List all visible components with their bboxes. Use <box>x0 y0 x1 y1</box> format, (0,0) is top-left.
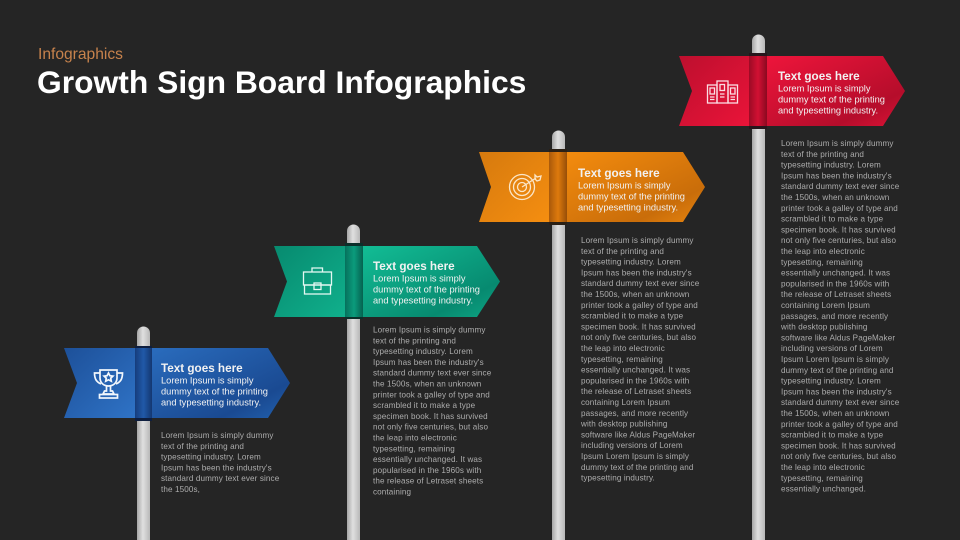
body text: passages, and more recently <box>781 312 889 321</box>
body text: the 1500s, when an unknown <box>781 193 889 202</box>
sign description: and typesetting industry. <box>778 106 878 116</box>
body text: not only five centuries, but also <box>781 236 896 245</box>
body text: the leap into electronic <box>781 247 865 256</box>
body text: containing Lorem Ipsum <box>781 301 870 310</box>
wrap band <box>135 346 152 421</box>
body text: text of the printing and <box>581 247 664 256</box>
sign arrow: right part <box>566 152 705 222</box>
sign arrow: left part <box>479 152 550 222</box>
body text: the release of Letraset sheets <box>581 387 691 396</box>
sign description: Lorem Ipsum is simply <box>778 84 871 94</box>
sign description: Lorem Ipsum is simply <box>161 376 254 386</box>
icon: target with dart <box>510 174 541 200</box>
body text: the 1500s, when an unknown <box>781 409 889 418</box>
body text: the release of Letraset sheets <box>373 477 483 486</box>
icon: three book spines <box>708 81 738 103</box>
body text: including versions of Lorem <box>581 441 683 450</box>
body text: standard dummy text ever since <box>161 474 280 483</box>
body text: standard dummy text ever since <box>581 279 700 288</box>
body text: typesetting, remaining <box>373 444 455 453</box>
wrap band <box>749 53 767 129</box>
body text: Ipsum has been the industry's <box>161 463 272 472</box>
body text: Ipsum has been the industry's <box>581 268 692 277</box>
body text: popularised in the 1960s with <box>781 279 889 288</box>
body text: specimen book. It has survived <box>581 322 696 331</box>
sign description: dummy text of the printing <box>778 94 885 104</box>
body text: passages, and more recently <box>581 409 689 418</box>
body text: Ipsum has been the industry's <box>373 358 484 367</box>
sign arrow: right part <box>766 56 905 126</box>
body text: scrambled it to make a type <box>781 215 884 224</box>
body text: typesetting industry. Lorem <box>161 453 261 462</box>
body text: scrambled it to make a type <box>781 431 884 440</box>
body text: typesetting industry. Lorem <box>373 347 473 356</box>
body text: containing <box>373 488 411 497</box>
body text: Lorem Ipsum is simply dummy <box>161 431 274 440</box>
sign description: and typesetting industry. <box>373 296 473 306</box>
body text: specimen book. It has survived <box>781 441 896 450</box>
pole <box>137 326 150 540</box>
body text: the leap into electronic <box>373 434 457 442</box>
sign heading: Text goes here <box>373 260 455 273</box>
sign description: Lorem Ipsum is simply <box>578 180 671 190</box>
body text: specimen book. It has survived <box>373 412 488 421</box>
sign arrow: right part <box>362 246 500 317</box>
sign description: Lorem Ipsum is simply <box>373 274 466 284</box>
body text: with desktop publishing <box>780 323 867 332</box>
icon: briefcase <box>304 268 332 294</box>
body text: typesetting, remaining <box>781 474 863 483</box>
body text: dummy text of the printing and <box>581 463 693 472</box>
body text: essentially unchanged. It was <box>581 366 690 375</box>
body text: standard dummy text ever since <box>373 369 492 378</box>
body text: typesetting industry. Lorem <box>781 377 881 386</box>
body text: text of the printing and <box>161 442 244 451</box>
sign arrow: left part <box>274 246 346 317</box>
sign description: dummy text of the printing <box>578 192 685 202</box>
body text: scrambled it to make a type <box>581 312 684 321</box>
sign arrow: left part <box>64 348 136 418</box>
sign heading: Text goes here <box>778 70 860 83</box>
sign description: and typesetting industry. <box>161 398 261 408</box>
body text: Lorem Ipsum is simply dummy <box>581 236 694 245</box>
body text: essentially unchanged. <box>781 485 866 494</box>
body text: printer took a galley of type and <box>373 390 490 399</box>
body text: the release of Letraset sheets <box>781 290 891 299</box>
wrap band <box>549 149 567 225</box>
sign arrow: left part <box>679 56 750 126</box>
body text: the 1500s, <box>161 485 200 494</box>
body text: containing Lorem Ipsum <box>581 398 670 407</box>
body text: Lorem Ipsum is simply dummy <box>781 139 894 148</box>
body text: scrambled it to make a type <box>373 401 476 410</box>
body text: typesetting, remaining <box>781 258 863 267</box>
eyebrow: Infographics: Infographics <box>38 46 123 63</box>
body text: Ipsum has been the industry's <box>781 387 892 396</box>
body text: Ipsum Lorem Ipsum is simply <box>581 452 690 461</box>
signpost 1: blue <box>64 326 290 540</box>
sign description: dummy text of the printing <box>373 284 480 294</box>
sign description: and typesetting industry. <box>578 202 678 212</box>
body text: essentially unchanged. It was <box>781 269 890 278</box>
signpost 2: green <box>274 225 500 540</box>
body text: the leap into electronic <box>781 463 865 472</box>
sign heading: Text goes here <box>578 167 660 180</box>
icon: trophy <box>94 370 122 398</box>
body text: not only five centuries, but also <box>581 333 696 342</box>
body text: typesetting industry. Lorem <box>581 258 681 267</box>
body text: Ipsum Lorem Ipsum is simply <box>781 355 890 364</box>
title: Growth Sign Board Infographics <box>37 64 526 100</box>
body text: popularised in the 1960s with <box>373 466 481 475</box>
pole <box>752 34 765 540</box>
body text: text of the printing and <box>373 336 456 345</box>
pole <box>552 130 565 540</box>
body text: popularised in the 1960s with <box>581 376 689 385</box>
body text: printer took a galley of type and <box>581 301 698 310</box>
body text: text of the printing and <box>781 150 864 159</box>
body text: printer took a galley of type and <box>781 420 898 429</box>
body text: standard dummy text ever since <box>781 182 900 191</box>
body text: dummy text of the printing and <box>781 366 893 375</box>
body text: standard dummy text ever since <box>781 398 900 407</box>
body text: software like Aldus PageMaker <box>781 333 895 342</box>
body text: specimen book. It has survived <box>781 225 896 234</box>
sign description: dummy text of the printing <box>161 386 268 396</box>
body text: typesetting industry. Lorem <box>781 161 881 170</box>
signpost 3: orange <box>479 130 705 540</box>
body text: Ipsum has been the industry's <box>781 171 892 180</box>
body text: including versions of Lorem <box>781 344 883 353</box>
body text: typesetting, remaining <box>581 355 663 364</box>
sign heading: Text goes here <box>161 362 243 375</box>
body text: not only five centuries, but also <box>373 423 488 432</box>
body text: the 1500s, when an unknown <box>373 380 481 388</box>
body text: with desktop publishing <box>580 420 667 429</box>
body text: typesetting industry. <box>581 474 655 483</box>
body text: the leap into electronic <box>581 344 665 353</box>
pole <box>347 225 360 540</box>
body text: essentially unchanged. It was <box>373 455 482 464</box>
sign arrow: right part <box>151 348 290 418</box>
body text: printer took a galley of type and <box>781 204 898 213</box>
signpost 4: red <box>679 34 905 540</box>
body text: software like Aldus PageMaker <box>581 430 695 439</box>
body text: the 1500s, when an unknown <box>581 290 689 299</box>
wrap band <box>345 243 363 319</box>
body text: Lorem Ipsum is simply dummy <box>373 326 486 334</box>
body text: not only five centuries, but also <box>781 452 896 461</box>
